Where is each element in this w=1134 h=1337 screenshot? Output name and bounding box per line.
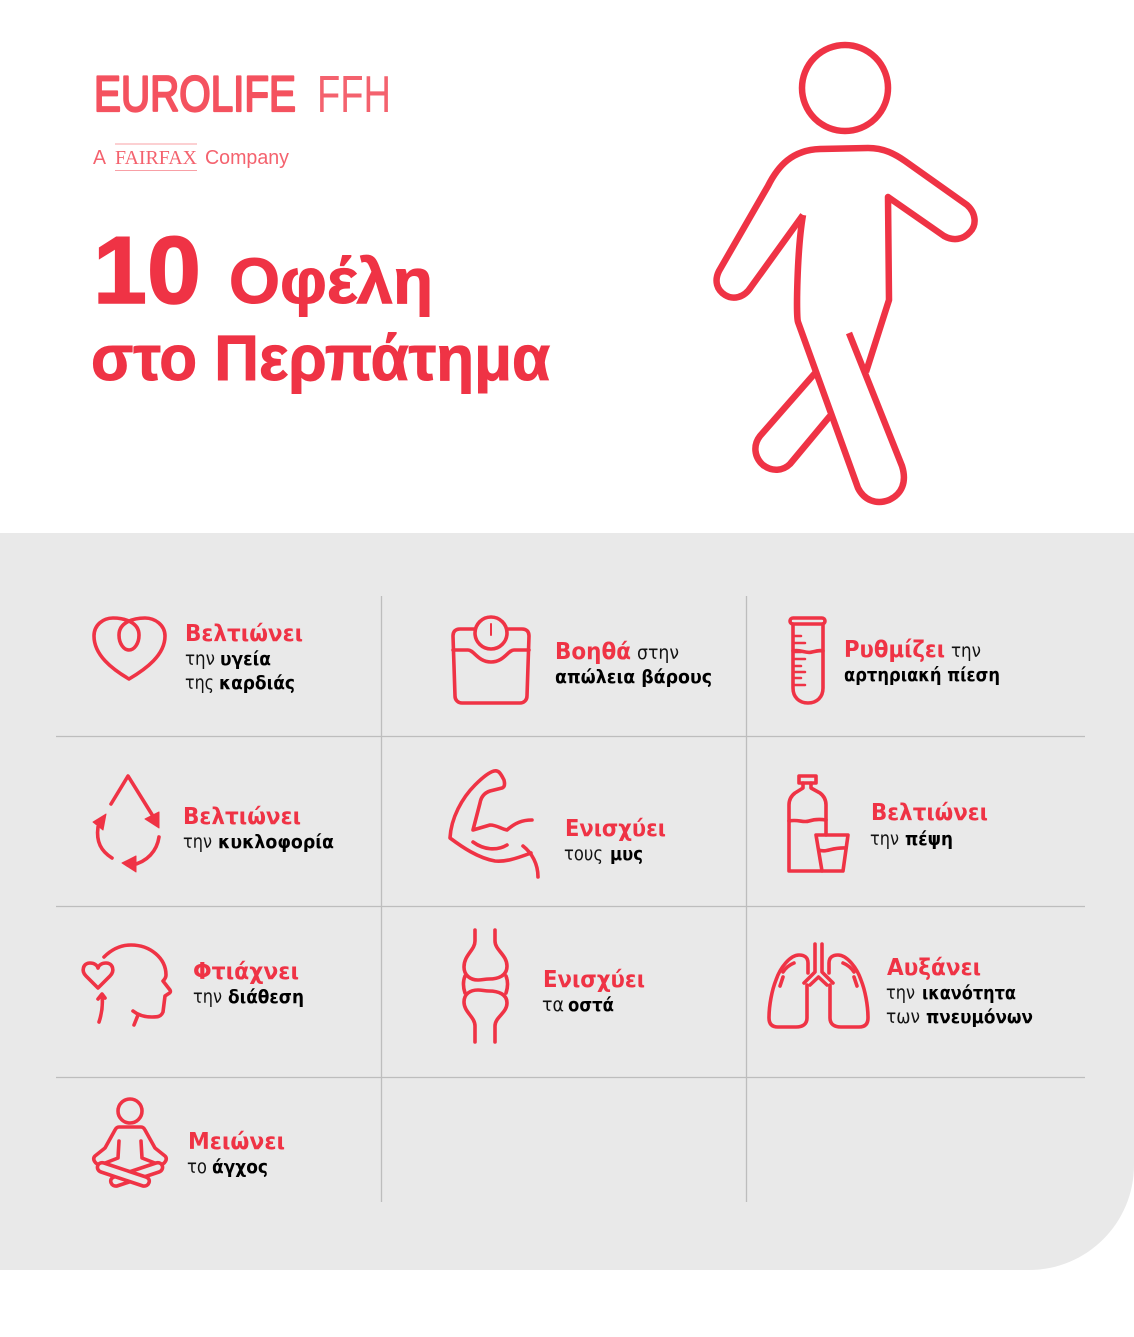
text: weight loss: απώλεια βάρους [555, 666, 712, 688]
text: anxiety: άγχος [212, 1156, 268, 1178]
text: circulation: την [183, 831, 212, 853]
icon: scale [453, 617, 529, 703]
text: lung capacity: ικανότητα [922, 982, 1016, 1004]
logo: Eurolife FFH: EUROLIFE [94, 66, 296, 122]
text: heart health: της [185, 672, 214, 694]
text: bones [542, 967, 645, 1016]
icon: lungs [769, 944, 868, 1027]
grid lines [56, 596, 1085, 1202]
text: muscles: Ενισχύει [565, 816, 666, 842]
benefit: mood [83, 945, 304, 1025]
text: mood: διάθεση [228, 986, 304, 1008]
benefit: anxiety [94, 1099, 285, 1186]
text: lung capacity: Αυξάνει [887, 955, 981, 981]
text: anxiety: το [187, 1156, 207, 1178]
text: heart health: καρδιάς [219, 672, 295, 694]
text: weight loss: στην [637, 642, 679, 664]
text: digestion: Βελτιώνει [871, 800, 988, 826]
text: blood pressure: την [951, 640, 981, 662]
text: muscles [564, 816, 666, 865]
text: weight loss [555, 639, 712, 688]
icon: test tube [790, 618, 825, 703]
text: mood [193, 959, 304, 1008]
panel: benefits [0, 533, 1134, 1270]
title: 10 [93, 217, 201, 324]
text: lung capacity: πνευμόνων [926, 1006, 1033, 1028]
text: muscles: μυς [610, 843, 643, 865]
text: digestion: την [870, 828, 899, 850]
text: blood pressure: Ρυθμίζει [844, 637, 945, 663]
text: mood: Φτιάχνει [193, 959, 299, 985]
text: lung capacity [886, 955, 1033, 1028]
text: lung capacity: την [886, 982, 915, 1004]
icon: flexed arm [450, 771, 538, 877]
logo: Eurolife FFH [93, 66, 391, 170]
title: Οφέλη [229, 245, 433, 317]
text: bones: οστά [568, 994, 614, 1016]
benefit: circulation [93, 776, 334, 872]
icon: walking person [717, 45, 975, 502]
benefit: heart health [94, 618, 303, 694]
text: blood pressure [844, 637, 1000, 686]
icon: head with heart [83, 945, 170, 1025]
icon: circulation drop [93, 776, 159, 872]
text: bones: τα [542, 994, 564, 1016]
icon: bottle and glass [789, 776, 848, 871]
benefit: bones [464, 930, 645, 1042]
logo: Eurolife FFH: Company [205, 147, 289, 169]
logo: Eurolife FFH: A [93, 147, 107, 169]
text: bones: Ενισχύει [543, 967, 645, 993]
benefit: digestion [789, 776, 988, 871]
benefit: lung capacity [769, 944, 1033, 1028]
title: στο Περπάτημα [91, 322, 550, 394]
text: heart health: Βελτιώνει [185, 621, 303, 647]
text: circulation: Βελτιώνει [183, 804, 301, 830]
text: lung capacity: των [886, 1006, 920, 1028]
text: heart health: την [185, 648, 215, 670]
text: digestion: πέψη [905, 828, 953, 850]
benefit: weight loss [453, 617, 712, 703]
text: blood pressure: αρτηριακή πίεση [844, 664, 1000, 686]
text: anxiety [187, 1129, 285, 1178]
benefit: blood pressure [790, 618, 1000, 703]
text: circulation [183, 804, 334, 853]
text: muscles: τους [564, 843, 603, 865]
title [91, 217, 550, 394]
text: weight loss: Βοηθά [555, 639, 631, 665]
icon: knee joint [464, 930, 508, 1042]
icon: heart [94, 618, 165, 679]
benefit: muscles [450, 771, 666, 877]
text: circulation: κυκλοφορία [218, 831, 334, 853]
text: heart health: υγεία [220, 648, 271, 670]
icon: meditating person [94, 1099, 166, 1186]
text: anxiety: Μειώνει [188, 1129, 285, 1155]
logo: Eurolife FFH: FFH [317, 66, 391, 124]
text: digestion [870, 800, 988, 850]
text: heart health [185, 621, 303, 694]
text: mood: την [193, 986, 222, 1008]
logo: Eurolife FFH: FAIRFAX [115, 147, 198, 169]
